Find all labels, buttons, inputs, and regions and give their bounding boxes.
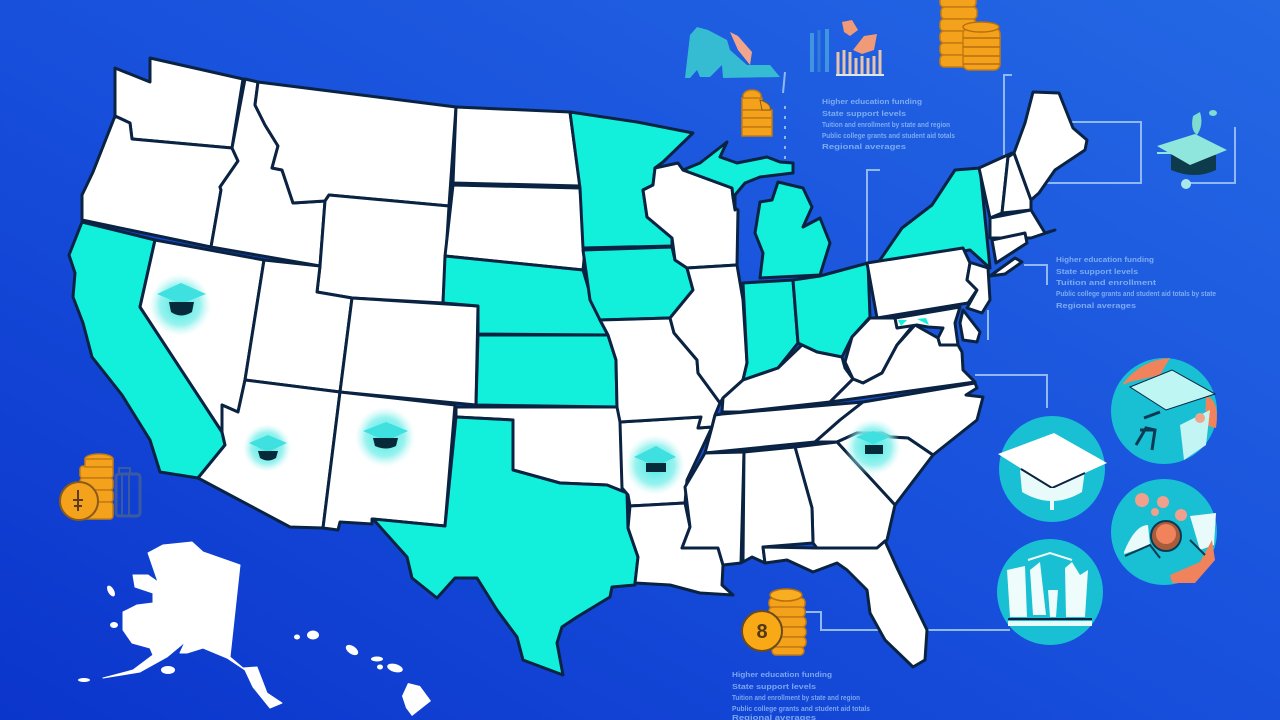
state: Mississippi bbox=[682, 452, 744, 565]
state: California bbox=[69, 222, 225, 478]
state: Indiana bbox=[743, 280, 798, 380]
state: North Carolina bbox=[815, 383, 983, 455]
text block: upper centre: Regional averages bbox=[822, 144, 906, 151]
graduation cap marker: New Mexico bbox=[355, 407, 415, 467]
state: Colorado bbox=[340, 298, 478, 405]
text block: bottom: State support levels bbox=[732, 684, 816, 691]
state: South Carolina bbox=[837, 433, 933, 505]
state: Delaware peninsula bbox=[960, 310, 980, 342]
graduation cap marker: South Carolina bbox=[845, 419, 901, 475]
state: Long Island bbox=[990, 258, 1022, 276]
text block: bottom: Tuition and enrollment by state and region bbox=[732, 695, 860, 702]
state: New Hampshire bbox=[1002, 153, 1031, 213]
icon: bars with hands bbox=[812, 20, 884, 75]
Alaska bbox=[103, 542, 282, 708]
state: Wisconsin bbox=[643, 163, 738, 268]
icon: coins, bottom centre bbox=[742, 589, 806, 655]
connector lines bbox=[783, 72, 1235, 630]
state: Arkansas bbox=[620, 417, 712, 506]
state: North Dakota bbox=[453, 107, 580, 186]
state: Illinois bbox=[670, 265, 747, 403]
state: Nevada bbox=[140, 240, 264, 432]
state: Maine bbox=[1014, 92, 1087, 200]
state: Pennsylvania bbox=[867, 248, 977, 318]
state: Michigan lower peninsula bbox=[755, 182, 830, 278]
state: New Jersey bbox=[967, 263, 990, 313]
state: Connecticut and Rhode Island bbox=[992, 233, 1027, 263]
state: Idaho bbox=[211, 79, 325, 266]
state: Maryland bbox=[895, 307, 960, 345]
state: Nebraska bbox=[443, 256, 608, 335]
Alaska and Hawaii islands bbox=[78, 584, 431, 716]
state: Alabama bbox=[743, 447, 813, 563]
state: Oregon bbox=[82, 116, 238, 247]
text block: right: Regional averages bbox=[1056, 303, 1136, 310]
text block: right: Tuition and enrollment bbox=[1056, 280, 1157, 287]
graduation cap marker: Arkansas bbox=[625, 435, 685, 495]
state: Missouri bbox=[600, 318, 720, 428]
state: West Virginia bbox=[845, 318, 915, 383]
badge: graduation cap bbox=[998, 416, 1107, 522]
state: New York bbox=[880, 168, 990, 268]
icon: teal landscape with hand bbox=[685, 27, 780, 78]
state: Minnesota bbox=[570, 112, 693, 248]
state: Iowa bbox=[583, 247, 693, 320]
graduation cap marker: Nevada bbox=[149, 274, 211, 336]
badge: hands around coin bbox=[1111, 479, 1217, 585]
icon: graduation cap, top right bbox=[1157, 110, 1227, 189]
state: Tennessee bbox=[705, 402, 863, 453]
text block: bottom: Higher education funding bbox=[732, 672, 832, 679]
state: Ohio bbox=[793, 263, 870, 357]
text block: upper centre bbox=[822, 99, 955, 151]
graduation cap marker: Arizona bbox=[243, 424, 291, 472]
state: Vermont bbox=[979, 153, 1012, 218]
state: Wyoming bbox=[317, 195, 449, 303]
state: Washington bbox=[115, 58, 243, 148]
state: Kentucky bbox=[722, 345, 853, 412]
icon: coin stacks, top bbox=[940, 0, 1000, 70]
state: South Dakota bbox=[445, 185, 585, 270]
state: Florida bbox=[763, 541, 927, 667]
state: Kansas bbox=[476, 335, 617, 407]
state: Utah bbox=[245, 260, 352, 392]
text block: bottom bbox=[732, 672, 870, 720]
icon: small coin stack bbox=[742, 90, 772, 136]
text block: right: State support levels bbox=[1056, 269, 1138, 276]
badge: graduate at desk bbox=[1111, 358, 1217, 464]
state: New Mexico bbox=[323, 392, 455, 530]
text block: right bbox=[1056, 257, 1216, 310]
marker: small teal wedges bbox=[898, 318, 929, 326]
state: Louisiana bbox=[628, 503, 733, 595]
text block: right: Higher education funding bbox=[1056, 257, 1154, 264]
badge: building columns bbox=[997, 539, 1103, 645]
text block: right: Public college grants and student aid totals by state bbox=[1056, 291, 1216, 298]
icon: coins, bottom centre: 8 bbox=[756, 621, 768, 643]
text block: upper centre: Public college grants and student aid totals bbox=[822, 133, 955, 140]
state: Texas bbox=[373, 417, 638, 675]
state: Montana bbox=[255, 82, 456, 206]
state: Virginia bbox=[830, 325, 975, 402]
state: Georgia bbox=[795, 442, 895, 548]
text block: upper centre: Higher education funding bbox=[822, 99, 922, 106]
state: Massachusetts bbox=[990, 210, 1055, 238]
text block: upper centre: State support levels bbox=[822, 111, 906, 118]
icon: coins with document, left bbox=[60, 454, 140, 520]
text block: bottom: Public college grants and student aid totals bbox=[732, 706, 870, 713]
state: Arizona bbox=[198, 380, 340, 528]
state: Oklahoma bbox=[456, 407, 627, 493]
text block: upper centre: Tuition and enrollment by state and region bbox=[822, 122, 950, 129]
state: Michigan upper peninsula bbox=[683, 142, 793, 210]
map: contiguous United States bbox=[69, 58, 1087, 675]
